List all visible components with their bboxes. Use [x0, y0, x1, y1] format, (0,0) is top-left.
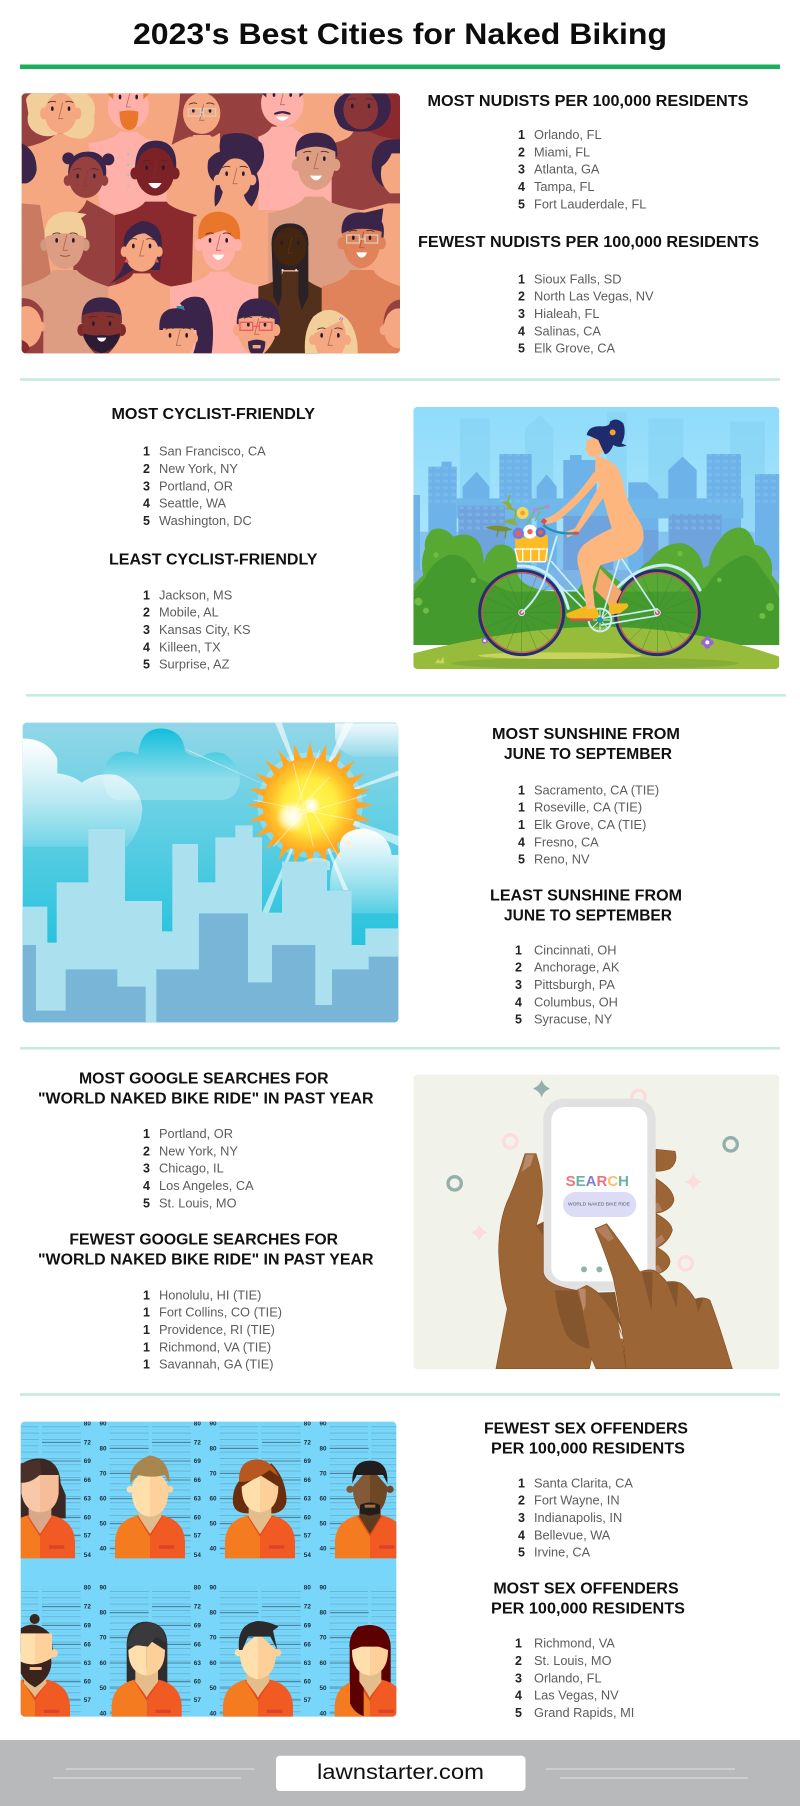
panel: sunshine	[20, 720, 682, 1027]
list: most sex offenders: 5	[515, 1706, 522, 1720]
height chart labels: 70	[319, 1635, 327, 1642]
height chart labels: 63	[194, 1496, 201, 1503]
heading: most nudists: MOST NUDISTS PER 100,000 RESIDENTS	[428, 93, 748, 110]
height chart labels: 54	[304, 1552, 311, 1559]
list: most cyclist-friendly: 4	[143, 497, 150, 511]
height chart labels: 66	[304, 1641, 311, 1648]
height chart labels: 63	[84, 1660, 91, 1667]
illustration: crowd of people	[22, 93, 400, 354]
height chart labels: 80	[84, 1420, 91, 1427]
list: least cyclist-friendly: 1	[143, 588, 150, 602]
height chart labels: 50	[209, 1685, 217, 1692]
list: most nudists: 2	[518, 145, 525, 159]
list: fewest sex offenders: 4	[518, 1528, 525, 1542]
list: fewest sex offenders: Indianapolis, IN	[534, 1510, 622, 1525]
list: most nudists: Miami, FL	[534, 144, 590, 159]
height chart labels: 57	[194, 1533, 201, 1540]
list: most sex offenders: Orlando, FL	[534, 1670, 602, 1685]
height chart labels: 70	[209, 1635, 217, 1642]
list: most sex offenders: Las Vegas, NV	[534, 1688, 619, 1703]
list: most sunshine: 1	[518, 783, 525, 797]
list: least sunshine: Anchorage, AK	[534, 960, 620, 975]
list: most nudists: 3	[518, 163, 525, 177]
heading: least sunshine: LEAST SUNSHINE FROM	[490, 888, 682, 905]
height chart labels	[84, 1420, 327, 1717]
height chart labels: 60	[304, 1514, 311, 1521]
heading: fewest nudists: FEWEST NUDISTS PER 100,000 RESIDENTS	[418, 234, 759, 251]
list: least cyclist-friendly: Surprise, AZ	[159, 657, 230, 672]
height chart labels: 40	[209, 1546, 217, 1553]
heading: least cyclist-friendly: LEAST CYCLIST-FRIENDLY	[109, 552, 318, 569]
list: most nudists	[518, 127, 646, 211]
list: least cyclist-friendly: Mobile, AL	[159, 605, 219, 620]
illustration: sun and city skyline	[22, 722, 398, 1022]
list: fewest nudists: Elk Grove, CA	[534, 341, 616, 356]
footer	[0, 1740, 800, 1806]
list: most sunshine: 1	[518, 818, 525, 832]
height chart labels: 72	[194, 1439, 201, 1446]
list: least sunshine	[515, 942, 620, 1027]
list: most nudists: 4	[518, 180, 525, 194]
list: most google searches: 5	[143, 1196, 150, 1210]
heading: least sunshine: JUNE TO SEPTEMBER	[504, 908, 672, 925]
footer badge: lawnstarter.com: lawnstarter.com	[317, 1761, 484, 1784]
height chart labels: 66	[304, 1477, 311, 1484]
height chart labels: 63	[304, 1496, 311, 1503]
height chart labels: 70	[99, 1635, 107, 1642]
list: most sex offenders: Richmond, VA	[534, 1636, 615, 1651]
list: fewest nudists: North Las Vegas, NV	[534, 289, 654, 304]
height chart labels: 80	[99, 1445, 107, 1452]
height chart labels: 60	[209, 1496, 217, 1503]
list: most nudists: Tampa, FL	[534, 179, 594, 194]
list: fewest google searches: 1	[143, 1288, 150, 1302]
list: fewest sex offenders: Irvine, CA	[534, 1545, 591, 1560]
list: fewest google searches: 1	[143, 1340, 150, 1354]
list: most sunshine: Sacramento, CA (TIE)	[534, 782, 659, 797]
list: fewest google searches: Savannah, GA (TIE)	[159, 1357, 274, 1372]
height chart labels: 69	[194, 1458, 201, 1465]
height chart labels: 70	[319, 1470, 327, 1477]
height chart labels: 80	[84, 1585, 91, 1592]
list: fewest google searches: Richmond, VA (TIE)	[159, 1339, 271, 1354]
list: fewest google searches: Honolulu, HI (TIE)	[159, 1287, 261, 1302]
list: most cyclist-friendly: New York, NY	[159, 461, 238, 476]
heading: most sex offenders: MOST SEX OFFENDERS	[493, 1580, 679, 1597]
height chart labels: 50	[209, 1521, 217, 1528]
height chart labels: 54	[84, 1552, 91, 1559]
illustration: hands holding phone: WORLD NAKED BIKE RIDE	[568, 1202, 630, 1207]
list: fewest sex offenders: 1	[518, 1476, 525, 1490]
list: most cyclist-friendly: 1	[143, 445, 150, 459]
list: fewest nudists: 3	[518, 307, 525, 321]
list: most sex offenders: St. Louis, MO	[534, 1653, 612, 1668]
list: most sunshine: 4	[518, 835, 525, 849]
height chart labels: 69	[84, 1622, 91, 1629]
list: most sex offenders: 2	[515, 1654, 522, 1668]
list: fewest nudists: 1	[518, 272, 525, 286]
list: most sunshine: Elk Grove, CA (TIE)	[534, 817, 646, 832]
panel: cyclist-friendly	[109, 405, 782, 672]
height chart labels: 90	[99, 1420, 107, 1427]
list: fewest sex offenders: 3	[518, 1511, 525, 1525]
height chart labels: 80	[194, 1420, 201, 1427]
height chart labels: 60	[319, 1496, 327, 1503]
list: least cyclist-friendly: 3	[143, 623, 150, 637]
height chart labels: 66	[84, 1641, 91, 1648]
height chart labels: 57	[304, 1697, 311, 1704]
heading: least sunshine	[490, 888, 682, 925]
list: most google searches: 2	[143, 1144, 150, 1158]
list: least sunshine: 1	[515, 943, 522, 957]
list: least sunshine: 4	[515, 995, 522, 1009]
height chart labels: 70	[99, 1470, 107, 1477]
list: fewest sex offenders: Bellevue, WA	[534, 1527, 611, 1542]
list: most cyclist-friendly: 3	[143, 479, 150, 493]
list: fewest sex offenders: Fort Wayne, IN	[534, 1493, 620, 1508]
height chart labels: 90	[319, 1420, 327, 1427]
list: fewest google searches: 1	[143, 1323, 150, 1337]
height chart labels: 54	[194, 1552, 201, 1559]
illustration: woman riding a bicycle	[413, 407, 780, 669]
height chart labels: 60	[99, 1496, 107, 1503]
list: least cyclist-friendly: 4	[143, 640, 150, 654]
list: most google searches: St. Louis, MO	[159, 1195, 237, 1210]
heading: most sex offenders	[491, 1580, 685, 1617]
list: most google searches: New York, NY	[159, 1143, 238, 1158]
list: most google searches: Los Angeles, CA	[159, 1178, 254, 1193]
height chart labels: 60	[194, 1679, 201, 1686]
list: fewest sex offenders: Santa Clarita, CA	[534, 1475, 633, 1490]
list: most sunshine	[518, 782, 659, 867]
list: least sunshine: 3	[515, 978, 522, 992]
height chart labels: 40	[319, 1710, 327, 1717]
list: most cyclist-friendly: Washington, DC	[159, 513, 252, 528]
height chart labels: 63	[304, 1660, 311, 1667]
height chart labels: 66	[84, 1477, 91, 1484]
list: least cyclist-friendly: Kansas City, KS	[159, 622, 251, 637]
list: most sunshine: Reno, NV	[534, 852, 590, 867]
height chart labels: 50	[99, 1685, 107, 1692]
illustration: hands holding phone	[414, 1074, 780, 1370]
heading: most cyclist-friendly: MOST CYCLIST-FRIENDLY	[112, 406, 316, 423]
height chart labels: 40	[319, 1546, 327, 1553]
list: most sunshine: 1	[518, 801, 525, 815]
height chart labels: 80	[194, 1585, 201, 1592]
height chart labels: 63	[194, 1660, 201, 1667]
panel: google searches	[38, 1070, 782, 1372]
height chart labels: 80	[209, 1610, 217, 1617]
heading: most google searches	[38, 1070, 373, 1107]
list: most sex offenders: 1	[515, 1637, 522, 1651]
list: least sunshine: 2	[515, 961, 522, 975]
list: fewest sex offenders	[518, 1475, 633, 1560]
list: least sunshine: Pittsburgh, PA	[534, 977, 615, 992]
height chart labels: 40	[99, 1710, 107, 1717]
height chart labels: 57	[84, 1533, 91, 1540]
list: most nudists: 1	[518, 128, 525, 142]
height chart labels: 40	[99, 1546, 107, 1553]
height chart labels: 69	[84, 1458, 91, 1465]
list: fewest nudists	[518, 271, 654, 356]
list: least cyclist-friendly: 5	[143, 658, 150, 672]
height chart labels: 80	[304, 1585, 311, 1592]
list: fewest google searches: 1	[143, 1358, 150, 1372]
list: least cyclist-friendly: Killeen, TX	[159, 639, 221, 654]
list: most nudists: Orlando, FL	[534, 127, 602, 142]
height chart labels: 57	[304, 1533, 311, 1540]
list: most cyclist-friendly: Seattle, WA	[159, 496, 227, 511]
list: fewest nudists: 5	[518, 342, 525, 356]
illustration: hands holding phone: SEARCH	[566, 1174, 629, 1190]
list: fewest nudists: Sioux Falls, SD	[534, 271, 621, 286]
height chart labels: 60	[209, 1660, 217, 1667]
height chart labels: 72	[194, 1604, 201, 1611]
height chart labels: 80	[319, 1445, 327, 1452]
height chart labels: 72	[84, 1604, 91, 1611]
height chart labels: 50	[99, 1521, 107, 1528]
height chart labels: 57	[84, 1697, 91, 1704]
list: least sunshine: Syracuse, NY	[534, 1012, 613, 1027]
height chart labels: 60	[194, 1514, 201, 1521]
footer badge: lawnstarter.com	[276, 1756, 526, 1791]
list: most google searches: Portland, OR	[159, 1126, 233, 1141]
height chart labels: 90	[209, 1420, 217, 1427]
panel: nudists	[11, 80, 759, 360]
list: most sunshine: 5	[518, 853, 525, 867]
height chart labels: 63	[84, 1496, 91, 1503]
heading: most sunshine	[492, 726, 680, 763]
heading: most sunshine: JUNE TO SEPTEMBER	[504, 746, 672, 763]
list: fewest sex offenders: 5	[518, 1546, 525, 1560]
list: most google searches	[143, 1126, 254, 1210]
height chart labels: 72	[304, 1604, 311, 1611]
height chart labels: 90	[319, 1585, 327, 1592]
height chart labels: 50	[319, 1685, 327, 1692]
height chart labels: 80	[319, 1610, 327, 1617]
heading: most sex offenders: PER 100,000 RESIDENTS	[491, 1600, 685, 1617]
list: most google searches: Chicago, IL	[159, 1161, 224, 1176]
height chart labels: 60	[319, 1660, 327, 1667]
list: most google searches: 1	[143, 1127, 150, 1141]
list: most sex offenders: 4	[515, 1689, 522, 1703]
height chart labels: 69	[194, 1622, 201, 1629]
height chart labels: 72	[84, 1439, 91, 1446]
list: least cyclist-friendly	[143, 587, 251, 672]
list: most nudists: Atlanta, GA	[534, 162, 600, 177]
list: most sex offenders	[515, 1636, 634, 1720]
list: fewest nudists: Salinas, CA	[534, 323, 601, 338]
height chart labels: 60	[99, 1660, 107, 1667]
list: fewest sex offenders: 2	[518, 1494, 525, 1508]
list: most sex offenders: 3	[515, 1671, 522, 1685]
list: most cyclist-friendly: 2	[143, 462, 150, 476]
height chart labels: 69	[304, 1458, 311, 1465]
heading: fewest google searches: "WORLD NAKED BIKE RIDE" IN PAST YEAR	[38, 1251, 373, 1268]
list: least cyclist-friendly: 2	[143, 606, 150, 620]
list: fewest google searches	[143, 1287, 282, 1372]
list: most cyclist-friendly: Portland, OR	[159, 478, 233, 493]
height chart labels: 72	[304, 1439, 311, 1446]
height chart labels: 40	[209, 1710, 217, 1717]
heading: most sunshine: MOST SUNSHINE FROM	[492, 726, 680, 743]
list: most sunshine: Fresno, CA	[534, 834, 599, 849]
list: fewest nudists: 2	[518, 290, 525, 304]
height chart labels: 66	[194, 1477, 201, 1484]
height chart labels: 57	[194, 1697, 201, 1704]
heading: fewest google searches	[38, 1231, 373, 1268]
list: most sunshine: Roseville, CA (TIE)	[534, 800, 642, 815]
height chart labels: 80	[304, 1420, 311, 1427]
list: most cyclist-friendly	[143, 444, 266, 528]
illustration: mugshot line-up	[20, 1422, 396, 1717]
list: fewest google searches: Fort Collins, CO (TIE)	[159, 1305, 282, 1320]
list: most google searches: 3	[143, 1162, 150, 1176]
title: 2023's Best Cities for Naked Biking	[133, 18, 667, 51]
list: most cyclist-friendly: 5	[143, 514, 150, 528]
list: most google searches: 4	[143, 1179, 150, 1193]
heading: fewest sex offenders	[484, 1420, 688, 1457]
heading: most google searches: MOST GOOGLE SEARCHES FOR	[79, 1070, 328, 1087]
panel: sex offenders	[0, 1420, 688, 1723]
list: most nudists: 5	[518, 197, 525, 211]
height chart labels: 80	[209, 1445, 217, 1452]
height chart labels: 66	[194, 1641, 201, 1648]
height chart labels: 90	[99, 1585, 107, 1592]
list: fewest google searches: Providence, RI (TIE)	[159, 1322, 275, 1337]
list: least sunshine: 5	[515, 1013, 522, 1027]
height chart labels: 80	[99, 1610, 107, 1617]
height chart labels: 60	[304, 1679, 311, 1686]
heading: fewest sex offenders: PER 100,000 RESIDENTS	[491, 1440, 685, 1457]
list: least sunshine: Columbus, OH	[534, 994, 618, 1009]
list: most nudists: Fort Lauderdale, FL	[534, 196, 646, 211]
height chart labels: 70	[209, 1470, 217, 1477]
height chart labels: 90	[209, 1585, 217, 1592]
height chart labels: 60	[84, 1514, 91, 1521]
list: least sunshine: Cincinnati, OH	[534, 942, 616, 957]
heading: fewest google searches: FEWEST GOOGLE SEARCHES FOR	[69, 1231, 338, 1248]
list: most cyclist-friendly: San Francisco, CA	[159, 444, 266, 459]
heading: most google searches: "WORLD NAKED BIKE RIDE" IN PAST YEAR	[38, 1090, 373, 1107]
height chart labels: 50	[319, 1521, 327, 1528]
list: most sex offenders: Grand Rapids, MI	[534, 1705, 634, 1720]
list: fewest nudists: Hialeah, FL	[534, 306, 599, 321]
height chart labels: 69	[304, 1622, 311, 1629]
list: fewest google searches: 1	[143, 1306, 150, 1320]
list: fewest nudists: 4	[518, 324, 525, 338]
list: least cyclist-friendly: Jackson, MS	[159, 587, 232, 602]
height chart labels: 60	[84, 1679, 91, 1686]
heading: fewest sex offenders: FEWEST SEX OFFENDERS	[484, 1420, 688, 1437]
